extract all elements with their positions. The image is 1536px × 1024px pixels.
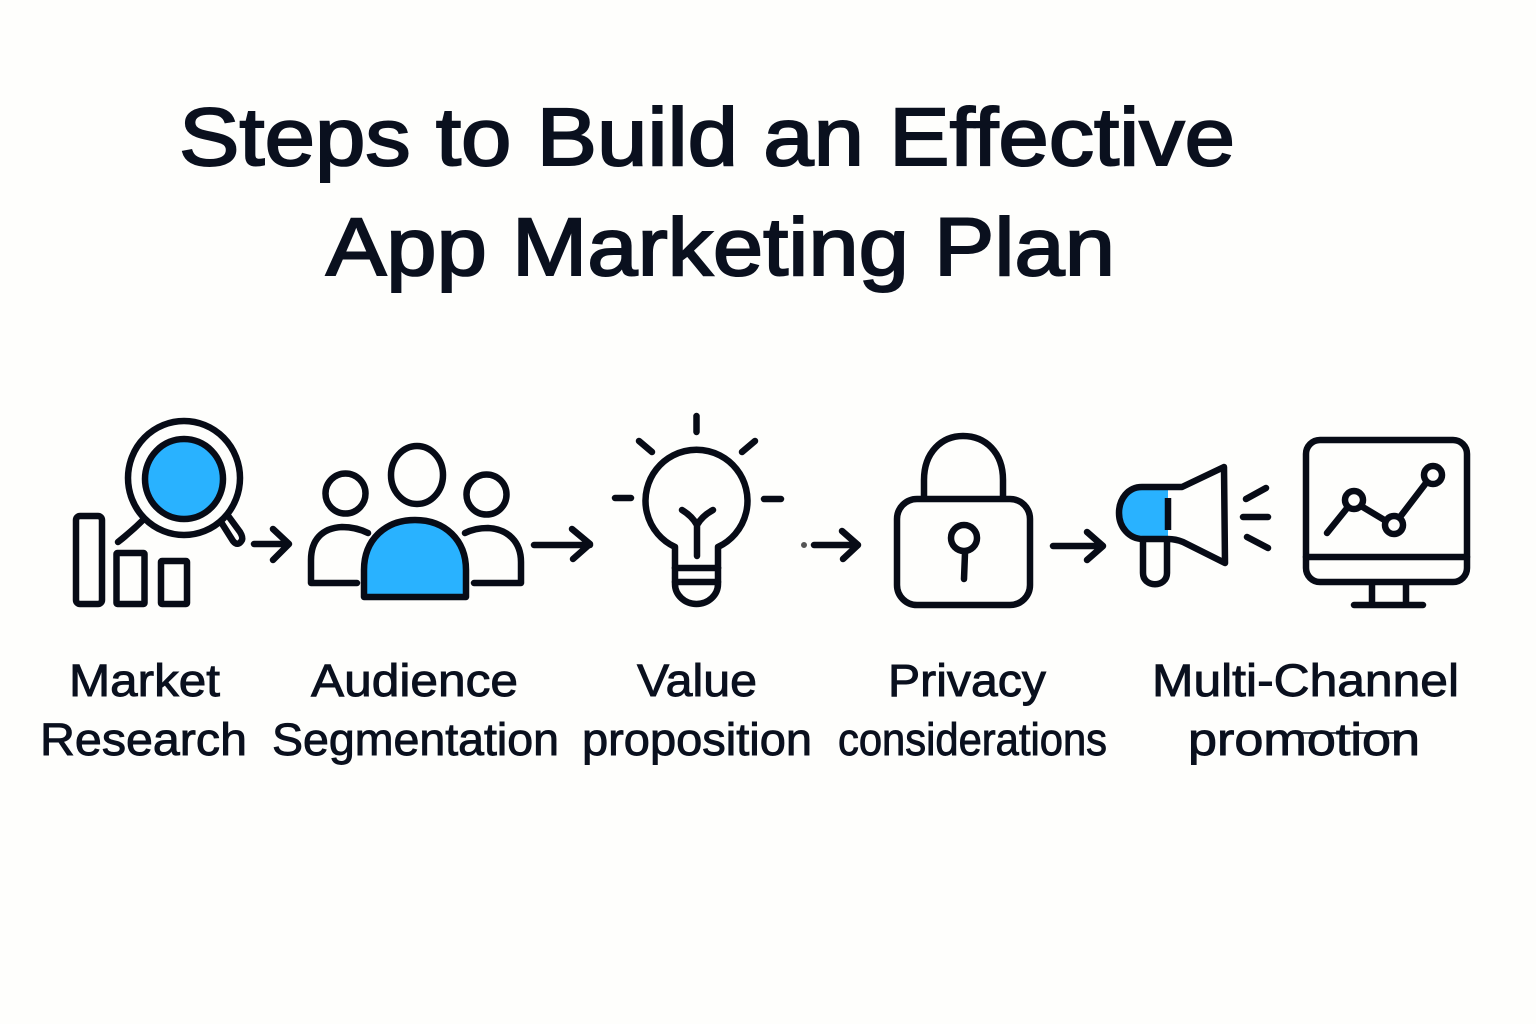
step 1: market research icon [76,421,242,604]
title: Steps to Build an Effective [179,92,1235,183]
label: multi-channel promotion: Multi-Channel [1152,655,1459,706]
arrow 2 [534,529,590,559]
step 5: multi-channel promotion megaphone icon [1119,467,1268,584]
title: App Marketing Plan [326,202,1115,293]
label: multi-channel promotion [1152,655,1459,765]
label: privacy considerations [838,655,1107,765]
label: value proposition: Value [637,655,757,706]
title [179,92,1235,293]
arrow 4 [1053,532,1103,560]
label: privacy considerations: considerations [838,714,1107,765]
label: market research: Research [40,714,247,765]
label: value proposition: proposition [582,714,812,765]
arrow 1 [254,529,289,560]
label: audience segmentation: Segmentation [272,714,559,765]
step 2: audience segmentation icon [311,446,521,597]
arrow 3 [802,531,858,559]
label: value proposition [582,655,812,765]
label: audience segmentation: Audience [311,655,518,706]
monitor with line chart icon [1306,440,1467,605]
label: audience segmentation [272,655,559,765]
label: market research [40,655,247,765]
step 4: privacy considerations icon [897,436,1030,605]
label: privacy considerations: Privacy [888,655,1047,706]
label: market research: Market [69,655,221,706]
step 3: value proposition icon [615,416,781,604]
label: multi-channel promotion: promotion [1188,714,1420,765]
